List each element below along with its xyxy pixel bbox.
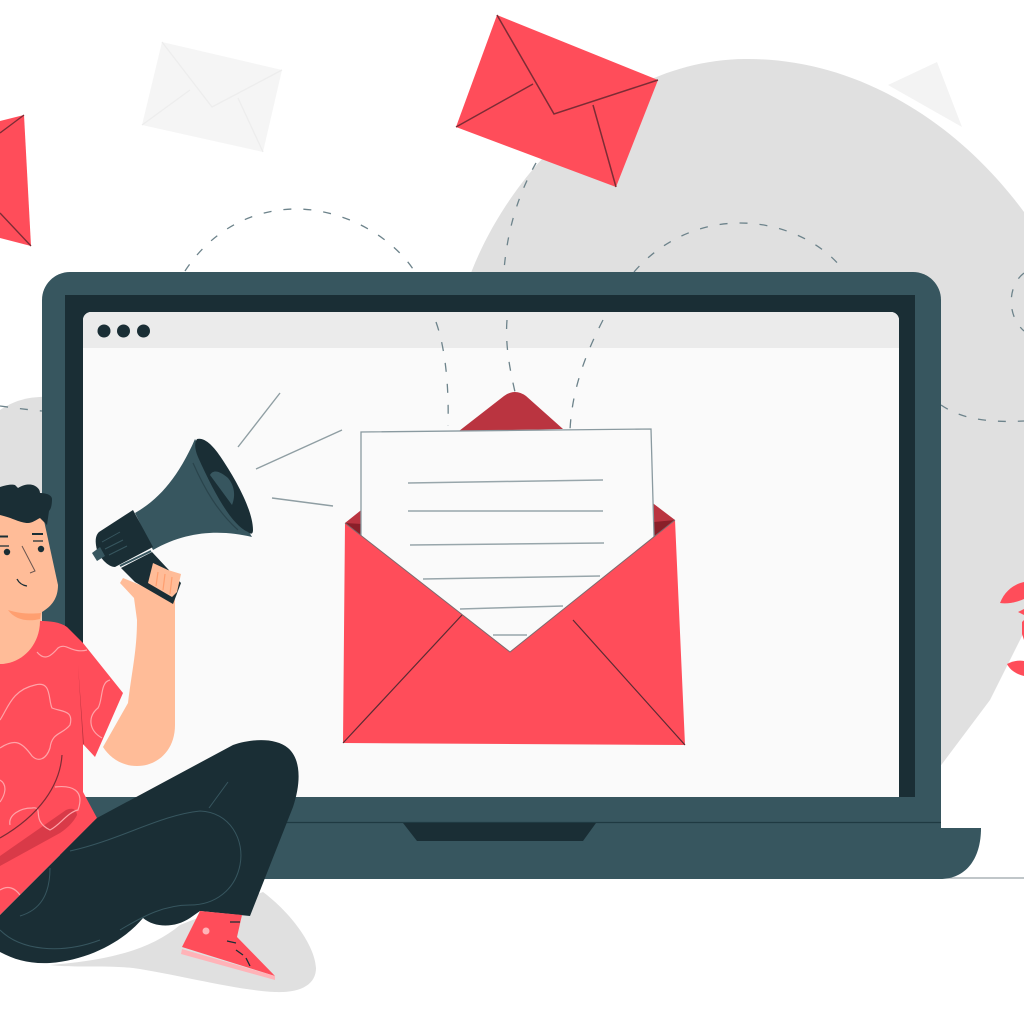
plant leaves at right edge <box>1000 582 1024 676</box>
browser title bar <box>83 312 899 348</box>
browser screen <box>83 312 899 797</box>
open envelope <box>343 392 685 745</box>
sound lines <box>238 393 342 506</box>
neck and face <box>0 515 58 664</box>
laptop notch <box>403 823 596 841</box>
shoe <box>181 911 275 980</box>
shirt <box>0 621 123 915</box>
pants <box>0 740 299 963</box>
megaphone grip <box>96 510 153 567</box>
browser dots <box>98 324 150 338</box>
icon: grey envelope <box>142 42 282 152</box>
icon: red envelope left <box>0 115 31 246</box>
letter text lines <box>408 480 604 635</box>
ground line <box>940 877 1024 879</box>
megaphone <box>92 439 253 604</box>
icon: faint envelope top right <box>888 62 962 127</box>
megaphone handle <box>121 552 181 604</box>
pants seams <box>0 782 241 949</box>
face details <box>0 534 43 586</box>
person <box>0 484 299 980</box>
letter <box>361 429 654 652</box>
laptop bezel <box>65 295 915 797</box>
laptop base <box>60 828 981 879</box>
dashed flight paths above laptop <box>0 163 1024 421</box>
back flap <box>459 392 563 431</box>
megaphone bell <box>195 439 253 534</box>
laptop <box>42 272 981 879</box>
megaphone cone <box>135 439 252 550</box>
dashed flight paths on screen <box>436 320 603 430</box>
fingers <box>148 563 181 597</box>
arm <box>103 578 175 766</box>
envelope front <box>343 520 685 745</box>
hair <box>0 484 52 525</box>
laptop lid <box>42 272 941 830</box>
icon: red envelope top <box>456 15 658 187</box>
shirt pattern <box>0 646 110 895</box>
